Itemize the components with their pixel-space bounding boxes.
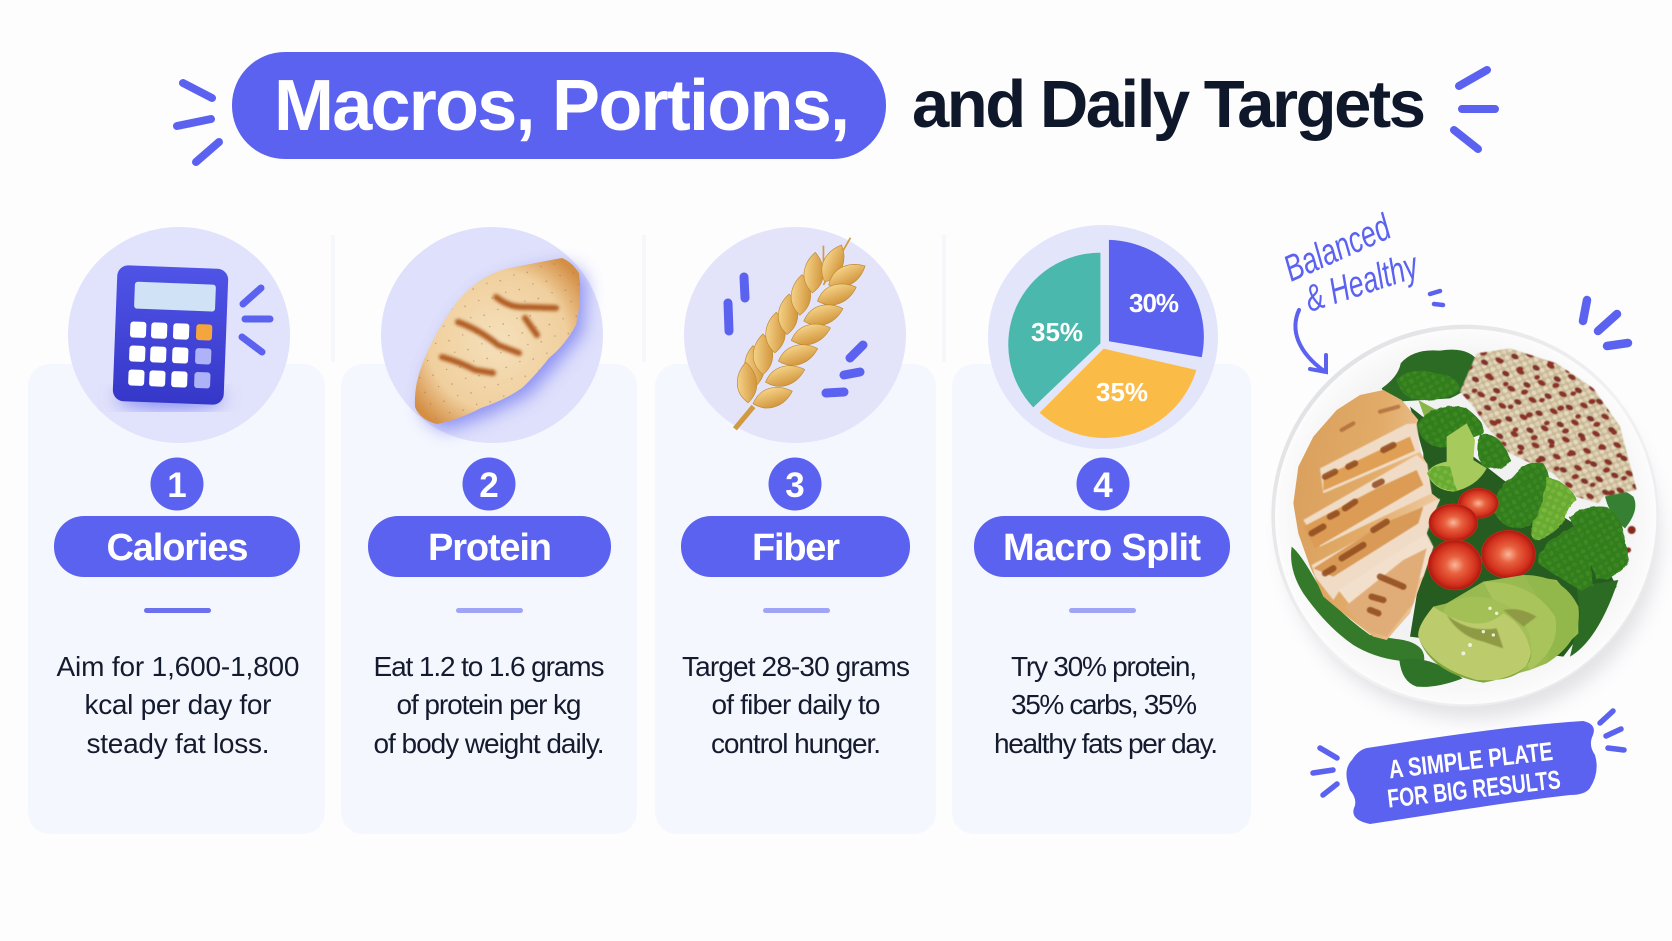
body text xyxy=(994,651,1218,759)
dividers xyxy=(333,235,944,362)
handwritten note: Balanced xyxy=(1278,206,1398,289)
chicken slices xyxy=(1293,390,1440,640)
number badge 4 xyxy=(1076,458,1130,510)
panel: calories xyxy=(28,227,325,834)
body text xyxy=(682,651,910,759)
callout banner: FOR BIG RESULTS xyxy=(1386,764,1562,814)
title pill xyxy=(232,52,886,159)
number badge 3: 3 xyxy=(785,466,805,505)
tomatoes xyxy=(1428,488,1535,590)
number badge 2 xyxy=(462,458,516,510)
body text: Eat 1.2 to 1.6 grams xyxy=(374,651,604,682)
plate of food xyxy=(1271,325,1660,719)
body text: kcal per day for xyxy=(84,689,272,720)
number badge 4: 4 xyxy=(1093,466,1113,505)
panel: macro split xyxy=(952,225,1251,834)
title sparks left xyxy=(177,83,219,162)
plate xyxy=(1271,325,1659,707)
panel: fiber xyxy=(655,227,936,834)
body text: 35% carbs, 35% xyxy=(1011,689,1197,720)
quinoa xyxy=(1460,348,1637,553)
body text xyxy=(56,651,300,759)
arrow to plate xyxy=(1295,310,1326,372)
heading: fiber xyxy=(681,516,910,577)
number badge 3 xyxy=(768,458,822,510)
plate sparks xyxy=(1583,300,1628,346)
callout banner: A SIMPLE PLATE xyxy=(1387,736,1554,784)
body text: of fiber daily to xyxy=(712,689,880,720)
number badge 1: 1 xyxy=(167,466,187,505)
icon circle: calculator xyxy=(68,227,290,443)
title sparks right xyxy=(1454,70,1495,149)
icon circle: grilled chicken xyxy=(381,227,603,443)
body text: healthy fats per day. xyxy=(994,728,1218,759)
banner sparks xyxy=(1313,711,1624,795)
pie chart: macro split: 30% xyxy=(1129,288,1179,318)
callout banner xyxy=(1346,721,1597,824)
body text: control hunger. xyxy=(711,728,881,759)
heading: macro split: Macro Split xyxy=(1003,527,1201,569)
title pill: Macros, Portions, xyxy=(274,66,850,146)
body text: Aim for 1,600-1,800 xyxy=(56,651,300,682)
heading: macro split xyxy=(974,516,1230,577)
body text xyxy=(374,651,604,759)
handwritten note: & Healthy xyxy=(1300,244,1425,320)
handwritten note xyxy=(1278,206,1425,320)
icon circle: wheat xyxy=(684,227,906,443)
heading: calories: Calories xyxy=(106,527,248,569)
heading: protein: Protein xyxy=(428,527,552,569)
pie chart: macro split xyxy=(988,225,1218,449)
number badge 1 xyxy=(150,458,204,510)
heading: calories xyxy=(54,516,300,577)
body text: of protein per kg xyxy=(396,689,582,720)
panel: protein xyxy=(341,227,637,834)
body text: Try 30% protein, xyxy=(1011,651,1197,682)
number badge 2: 2 xyxy=(479,466,499,505)
avocado xyxy=(1418,575,1579,683)
broccoli xyxy=(1397,371,1629,590)
body text: steady fat loss. xyxy=(86,728,270,759)
spinach xyxy=(1291,350,1635,687)
note marks xyxy=(1430,291,1443,305)
body text: Target 28-30 grams xyxy=(682,651,910,682)
pie chart: macro split: 35% xyxy=(1096,377,1148,407)
pie chart: macro split: 35% xyxy=(1031,317,1083,347)
dark underlay xyxy=(1410,407,1617,657)
title dark text: and Daily Targets xyxy=(912,67,1426,142)
heading: fiber: Fiber xyxy=(752,527,840,569)
heading: protein xyxy=(368,516,611,577)
body text: of body weight daily. xyxy=(374,728,604,759)
